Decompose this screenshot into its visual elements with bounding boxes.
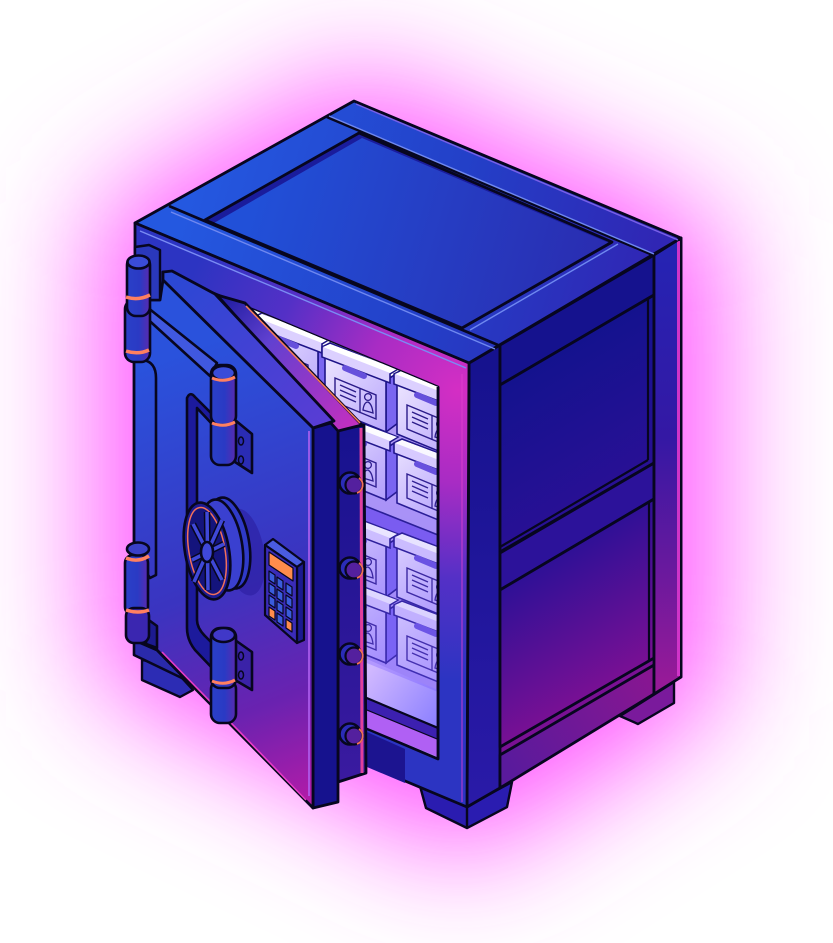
hinge: door upper xyxy=(211,365,252,473)
hinge: door lower xyxy=(211,628,252,723)
right post xyxy=(654,238,681,694)
boxes back column xyxy=(258,312,331,384)
safe feet xyxy=(142,660,674,828)
door bottom-left bevel xyxy=(134,640,186,680)
lock dial wheel xyxy=(177,494,271,603)
corner post xyxy=(467,345,500,807)
upper panel band xyxy=(500,255,654,385)
door left rim line xyxy=(140,360,156,578)
door recess channel xyxy=(187,394,214,670)
keypad xyxy=(265,539,304,643)
recessed top panel xyxy=(205,133,612,328)
hinge: lower left xyxy=(125,542,157,648)
safe door xyxy=(125,245,366,808)
upper panel xyxy=(500,295,654,552)
tint over boxes xyxy=(366,455,437,692)
middle bar xyxy=(500,463,654,590)
door side edges with bolts xyxy=(313,421,366,808)
hinge: upper left xyxy=(125,256,150,362)
boxes column 1 xyxy=(322,343,398,432)
base rail xyxy=(500,665,654,788)
door bolts xyxy=(340,472,363,744)
safe interior with archive boxes xyxy=(163,272,470,759)
boxes column 2 xyxy=(393,370,438,451)
right side of safe xyxy=(467,238,681,807)
door top bevels xyxy=(163,271,362,431)
door rib xyxy=(142,303,217,376)
door front plate xyxy=(134,280,313,808)
top of safe xyxy=(135,101,681,363)
floor xyxy=(366,659,437,726)
front frame xyxy=(135,223,469,807)
hinge plate top xyxy=(135,245,160,300)
lower panel xyxy=(500,499,654,747)
